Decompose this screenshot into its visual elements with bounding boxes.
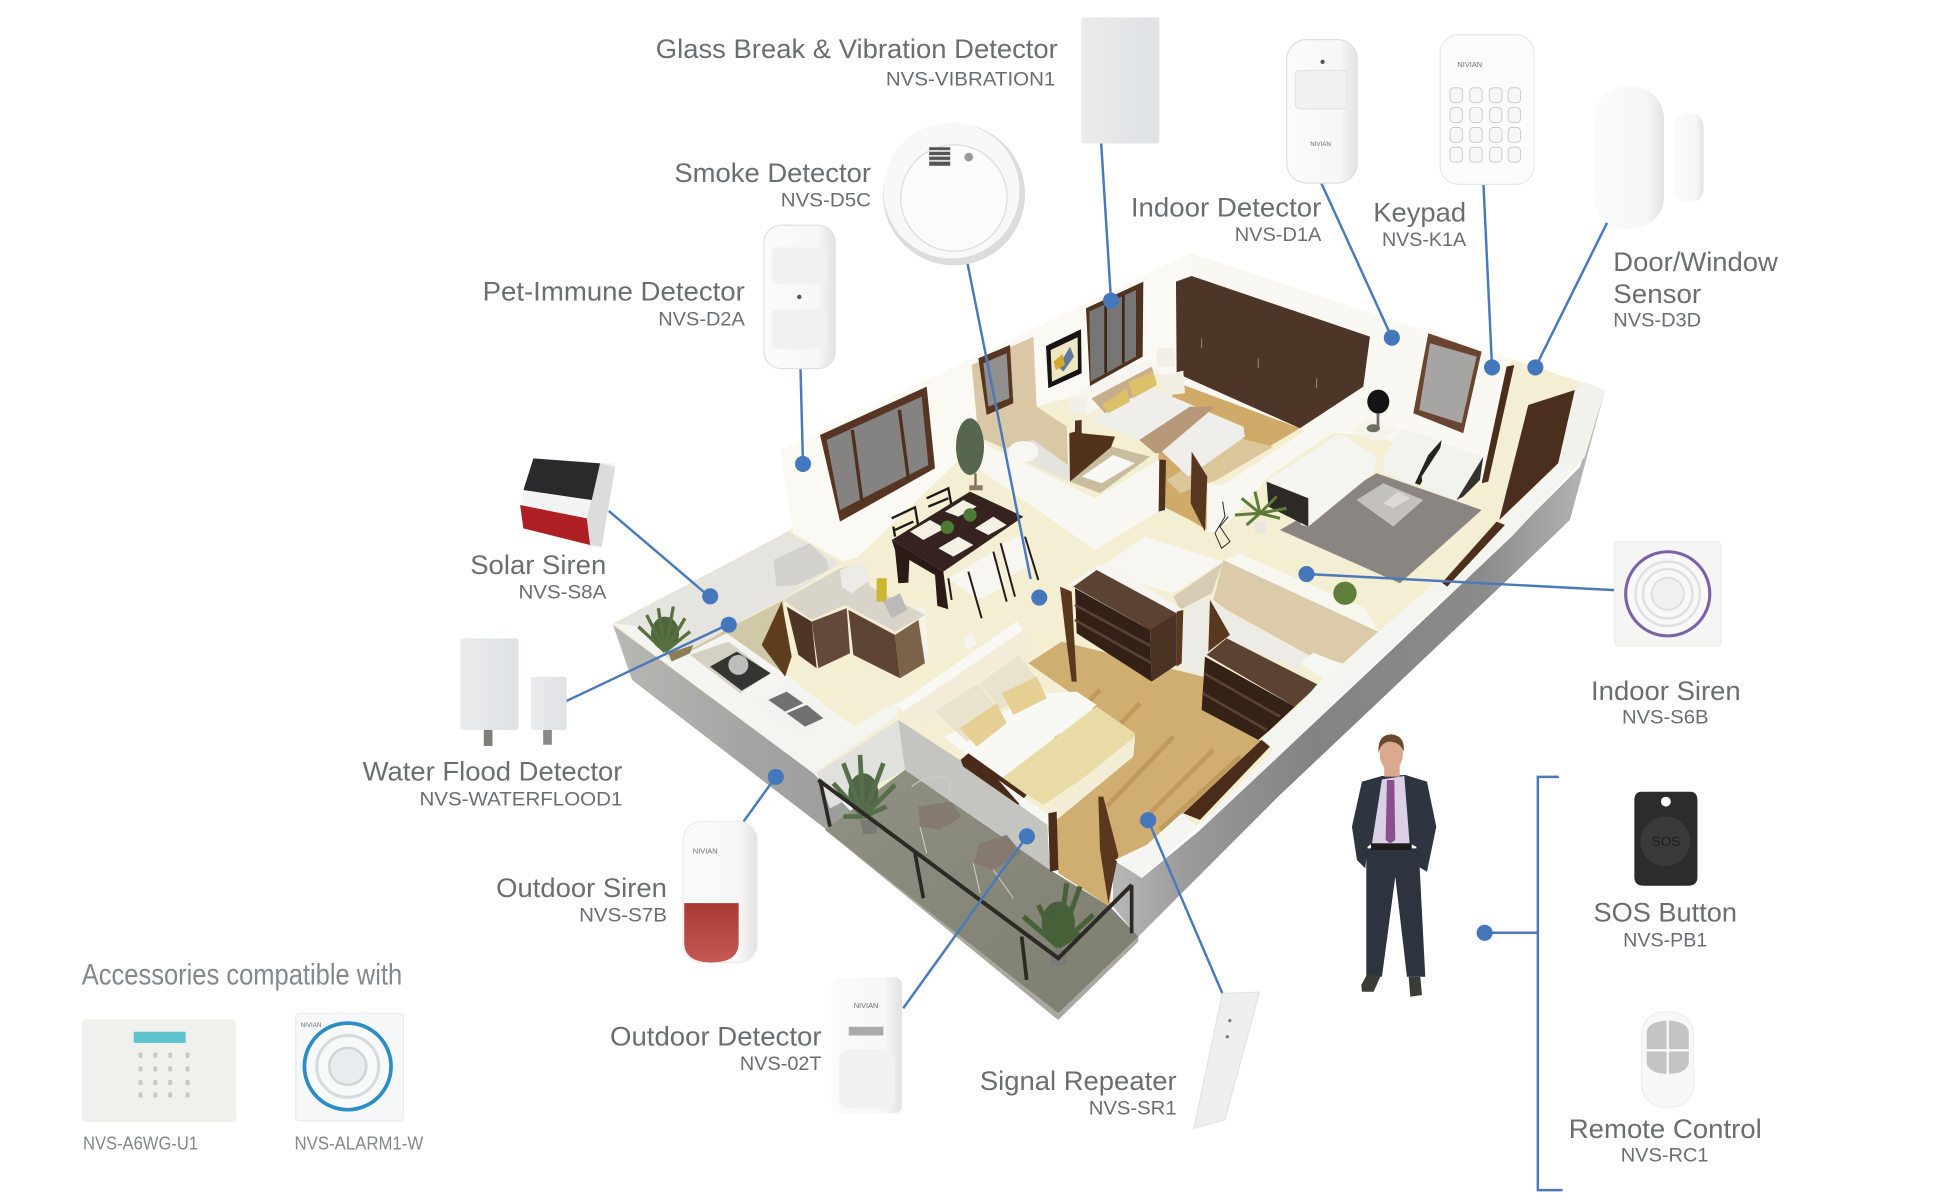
pet-immune detector [483, 225, 835, 369]
panel wall [1213, 560, 1378, 663]
label: NVS-D5C [781, 190, 871, 212]
sink [757, 685, 832, 737]
island worktop [783, 563, 925, 632]
label: Remote Control [1569, 1113, 1762, 1144]
icon: outdoor siren [683, 821, 757, 962]
bed post [1048, 812, 1058, 872]
floor [825, 770, 1138, 1013]
headboard [897, 622, 1027, 727]
label: Door/Window [1613, 246, 1778, 277]
blanket [1002, 707, 1135, 805]
label [610, 1020, 822, 1075]
label: Indoor Siren [1591, 675, 1741, 706]
shelf unit 2 [1202, 638, 1318, 740]
back wall and left room [780, 253, 1192, 562]
wall picture [1046, 329, 1082, 388]
kitchen [613, 532, 928, 773]
label [674, 157, 871, 212]
pillows [1092, 367, 1157, 413]
bed [1088, 387, 1245, 477]
icon: alarm siren [296, 1013, 403, 1121]
icon: keypad device [1440, 35, 1534, 184]
plant front [1023, 883, 1093, 967]
shelf unit 1 [1073, 570, 1177, 682]
kitchen wall [613, 532, 840, 660]
plant [1235, 492, 1287, 534]
label [470, 549, 607, 604]
label: NVS-SR1 [1089, 1098, 1177, 1120]
shirt [1372, 776, 1410, 843]
outdoor detector [610, 977, 902, 1113]
label: Signal Repeater [980, 1065, 1177, 1096]
plant [1333, 582, 1357, 605]
wall post [1159, 459, 1166, 512]
kitchen floor [670, 600, 787, 677]
indoor siren [1591, 542, 1741, 729]
door leaf near balcony [1098, 797, 1118, 903]
wash basin counter [1065, 537, 1223, 618]
icon: vibration sensor [1081, 17, 1159, 144]
wall post [1482, 365, 1514, 483]
footboard [961, 753, 1027, 805]
balcony [817, 720, 1138, 1020]
label [496, 872, 667, 927]
wall face [780, 253, 1192, 562]
wall end [1115, 813, 1198, 878]
model label: NVS-ALARM1-W [295, 1132, 424, 1153]
cabinet door [762, 602, 792, 677]
model label: NVS-A6WG-U1 [83, 1132, 198, 1153]
head [1378, 734, 1404, 777]
right wall window recess [1442, 522, 1505, 587]
smoke detector [674, 122, 1025, 265]
side walls [817, 720, 905, 808]
icon: smoke detector [883, 122, 1025, 265]
fridge [773, 543, 828, 587]
legs [1366, 848, 1425, 977]
dining chairs back [892, 488, 952, 537]
bathroom wall [977, 440, 1162, 550]
accessory: control panel [82, 1019, 236, 1153]
label: NVS-S8A [518, 582, 607, 604]
water flood detector [363, 638, 622, 810]
belt [1371, 843, 1412, 850]
top strip near door [1500, 463, 1577, 535]
icon: panic button: SOS [1652, 834, 1680, 849]
plant [638, 607, 693, 662]
wardrobe [1176, 276, 1370, 428]
solar siren [470, 458, 615, 604]
dining chairs front [948, 535, 1038, 618]
window [1413, 333, 1482, 433]
label: SOS Button [1594, 897, 1737, 928]
label [1613, 246, 1778, 332]
label: Indoor Detector [1131, 191, 1321, 222]
balcony railing and plants [818, 755, 1198, 980]
label: Pet-Immune Detector [483, 276, 745, 307]
icon: keypad device: NIVIAN [1457, 60, 1482, 69]
icon: outdoor siren: NIVIAN [693, 847, 718, 856]
shoes [1361, 973, 1422, 997]
right outer wall [1113, 390, 1605, 937]
left outer wall [613, 625, 1058, 1020]
floor plan: apartment [613, 253, 1605, 1020]
label [1594, 897, 1737, 951]
accessories heading: Accessories compatible with [82, 959, 402, 992]
label: NVS-RC1 [1621, 1145, 1709, 1167]
window recess [1183, 740, 1270, 820]
door side wall [1558, 382, 1605, 467]
bracket connector [1477, 777, 1563, 1190]
bed frame [1050, 737, 1135, 820]
bathroom floor and toilet [1000, 440, 1070, 482]
label [483, 276, 746, 330]
side table and lamp [1348, 390, 1397, 442]
headboard top [897, 622, 1023, 712]
bed runner [1139, 407, 1215, 453]
label: NVS-D1A [1235, 224, 1322, 246]
label [1131, 191, 1322, 246]
entrance door [1499, 390, 1575, 520]
icon: indoor siren [1615, 542, 1721, 646]
label: NVS-02T [740, 1053, 822, 1075]
stove [690, 642, 771, 693]
vanity [1070, 447, 1150, 493]
sculpture [1215, 502, 1230, 548]
connector lines and dots [565, 142, 1615, 1008]
glass break and vibration detector [656, 17, 1159, 144]
label: NVS-WATERFLOOD1 [419, 788, 622, 810]
label [1569, 1113, 1762, 1167]
person [1352, 734, 1436, 997]
mini wall [963, 633, 977, 650]
rug [1167, 437, 1273, 493]
label [980, 1065, 1177, 1120]
tie [1386, 780, 1395, 843]
bath [1300, 653, 1343, 680]
icon: alarm siren: NIVIAN [301, 1022, 321, 1029]
small strip [1447, 525, 1513, 597]
pillows [935, 655, 1047, 747]
living room [1207, 333, 1605, 597]
icon: water sensor [460, 638, 567, 746]
label: NVS-S7B [579, 905, 667, 927]
label: NVS-S6B [1622, 707, 1709, 729]
partition wall [1207, 390, 1372, 533]
label: Water Flood Detector [363, 756, 622, 787]
railing posts [820, 780, 1132, 980]
label: Outdoor Siren [496, 872, 667, 903]
wardrobe doors [1202, 338, 1317, 388]
island cabinets [787, 605, 928, 678]
wooden floor [1028, 642, 1263, 907]
dining table [892, 492, 1023, 609]
chairs [912, 777, 1022, 898]
icon: outdoor PIR [831, 977, 902, 1113]
main bed [897, 622, 1135, 872]
bedroom floor [1158, 377, 1300, 530]
door leaf [1208, 600, 1230, 652]
right wall strip lower [1198, 747, 1278, 832]
floor planks [1053, 690, 1240, 830]
label: NVS-K1A [1382, 229, 1467, 251]
floor edge [825, 830, 1138, 1020]
label: Sensor [1613, 278, 1701, 309]
main window [820, 387, 935, 522]
label: NVS-D2A [658, 308, 746, 330]
wall end [998, 780, 1057, 827]
label: Glass Break & Vibration Detector [656, 33, 1058, 64]
label: Keypad [1373, 196, 1466, 227]
accessory: indoor alarm [295, 1013, 424, 1153]
jacket [1352, 775, 1436, 872]
right wall strip [1262, 580, 1447, 757]
label [1373, 196, 1467, 251]
tile strip [972, 337, 1068, 480]
label [1591, 675, 1741, 729]
tree [956, 418, 984, 490]
lower rooms [1028, 537, 1447, 907]
bedroom and bathroom [892, 276, 1370, 618]
keypad [1373, 35, 1534, 251]
icon: panic button [1634, 792, 1697, 886]
icon: repeater [1194, 992, 1259, 1128]
counter strip [613, 623, 900, 773]
signal repeater [980, 992, 1259, 1128]
headboard [1068, 358, 1160, 415]
icon: outdoor PIR: NIVIAN [854, 1001, 878, 1010]
icon: PIR sensor [1287, 40, 1357, 183]
icon: solar siren [520, 458, 615, 547]
label: Solar Siren [470, 549, 606, 580]
lamps and nightstand [1068, 348, 1185, 413]
icon: alarm panel [82, 1019, 236, 1122]
right back wall [1140, 253, 1513, 483]
label: NVS-D3D [1613, 310, 1701, 332]
railing [818, 780, 1132, 958]
label: Outdoor Detector [610, 1020, 822, 1051]
small window [978, 345, 1013, 415]
icon: pet-immune sensor [764, 225, 835, 369]
outdoor siren [496, 821, 757, 962]
sofa [1267, 435, 1377, 527]
door and window sensor [1594, 87, 1778, 332]
icon: magnetic sensor [1594, 87, 1704, 229]
post [1048, 812, 1058, 872]
coffee maker and toaster [840, 562, 907, 618]
label: Smoke Detector [674, 157, 871, 188]
sheet [943, 692, 1097, 778]
SOS button [1594, 792, 1737, 951]
plant rear [833, 755, 895, 835]
armchairs [1383, 428, 1483, 500]
door leaf and post [1060, 587, 1183, 682]
icon: remote control [1642, 1012, 1694, 1107]
door [1191, 452, 1207, 532]
white wall top [1223, 554, 1378, 632]
coffee table [1357, 483, 1423, 527]
label [656, 33, 1058, 90]
bathroom tile floor [1177, 600, 1310, 677]
remote control [1569, 1012, 1762, 1167]
bedroom window [1086, 282, 1143, 386]
icon: PIR sensor: NIVIAN [1310, 141, 1331, 148]
label: NVS-PB1 [1623, 929, 1707, 951]
bathroom door [1069, 420, 1115, 482]
rug [1280, 473, 1482, 583]
label: NVS-VIBRATION1 [886, 68, 1055, 90]
indoor detector [1131, 40, 1357, 246]
cream floor [613, 253, 1590, 875]
label [363, 756, 622, 810]
